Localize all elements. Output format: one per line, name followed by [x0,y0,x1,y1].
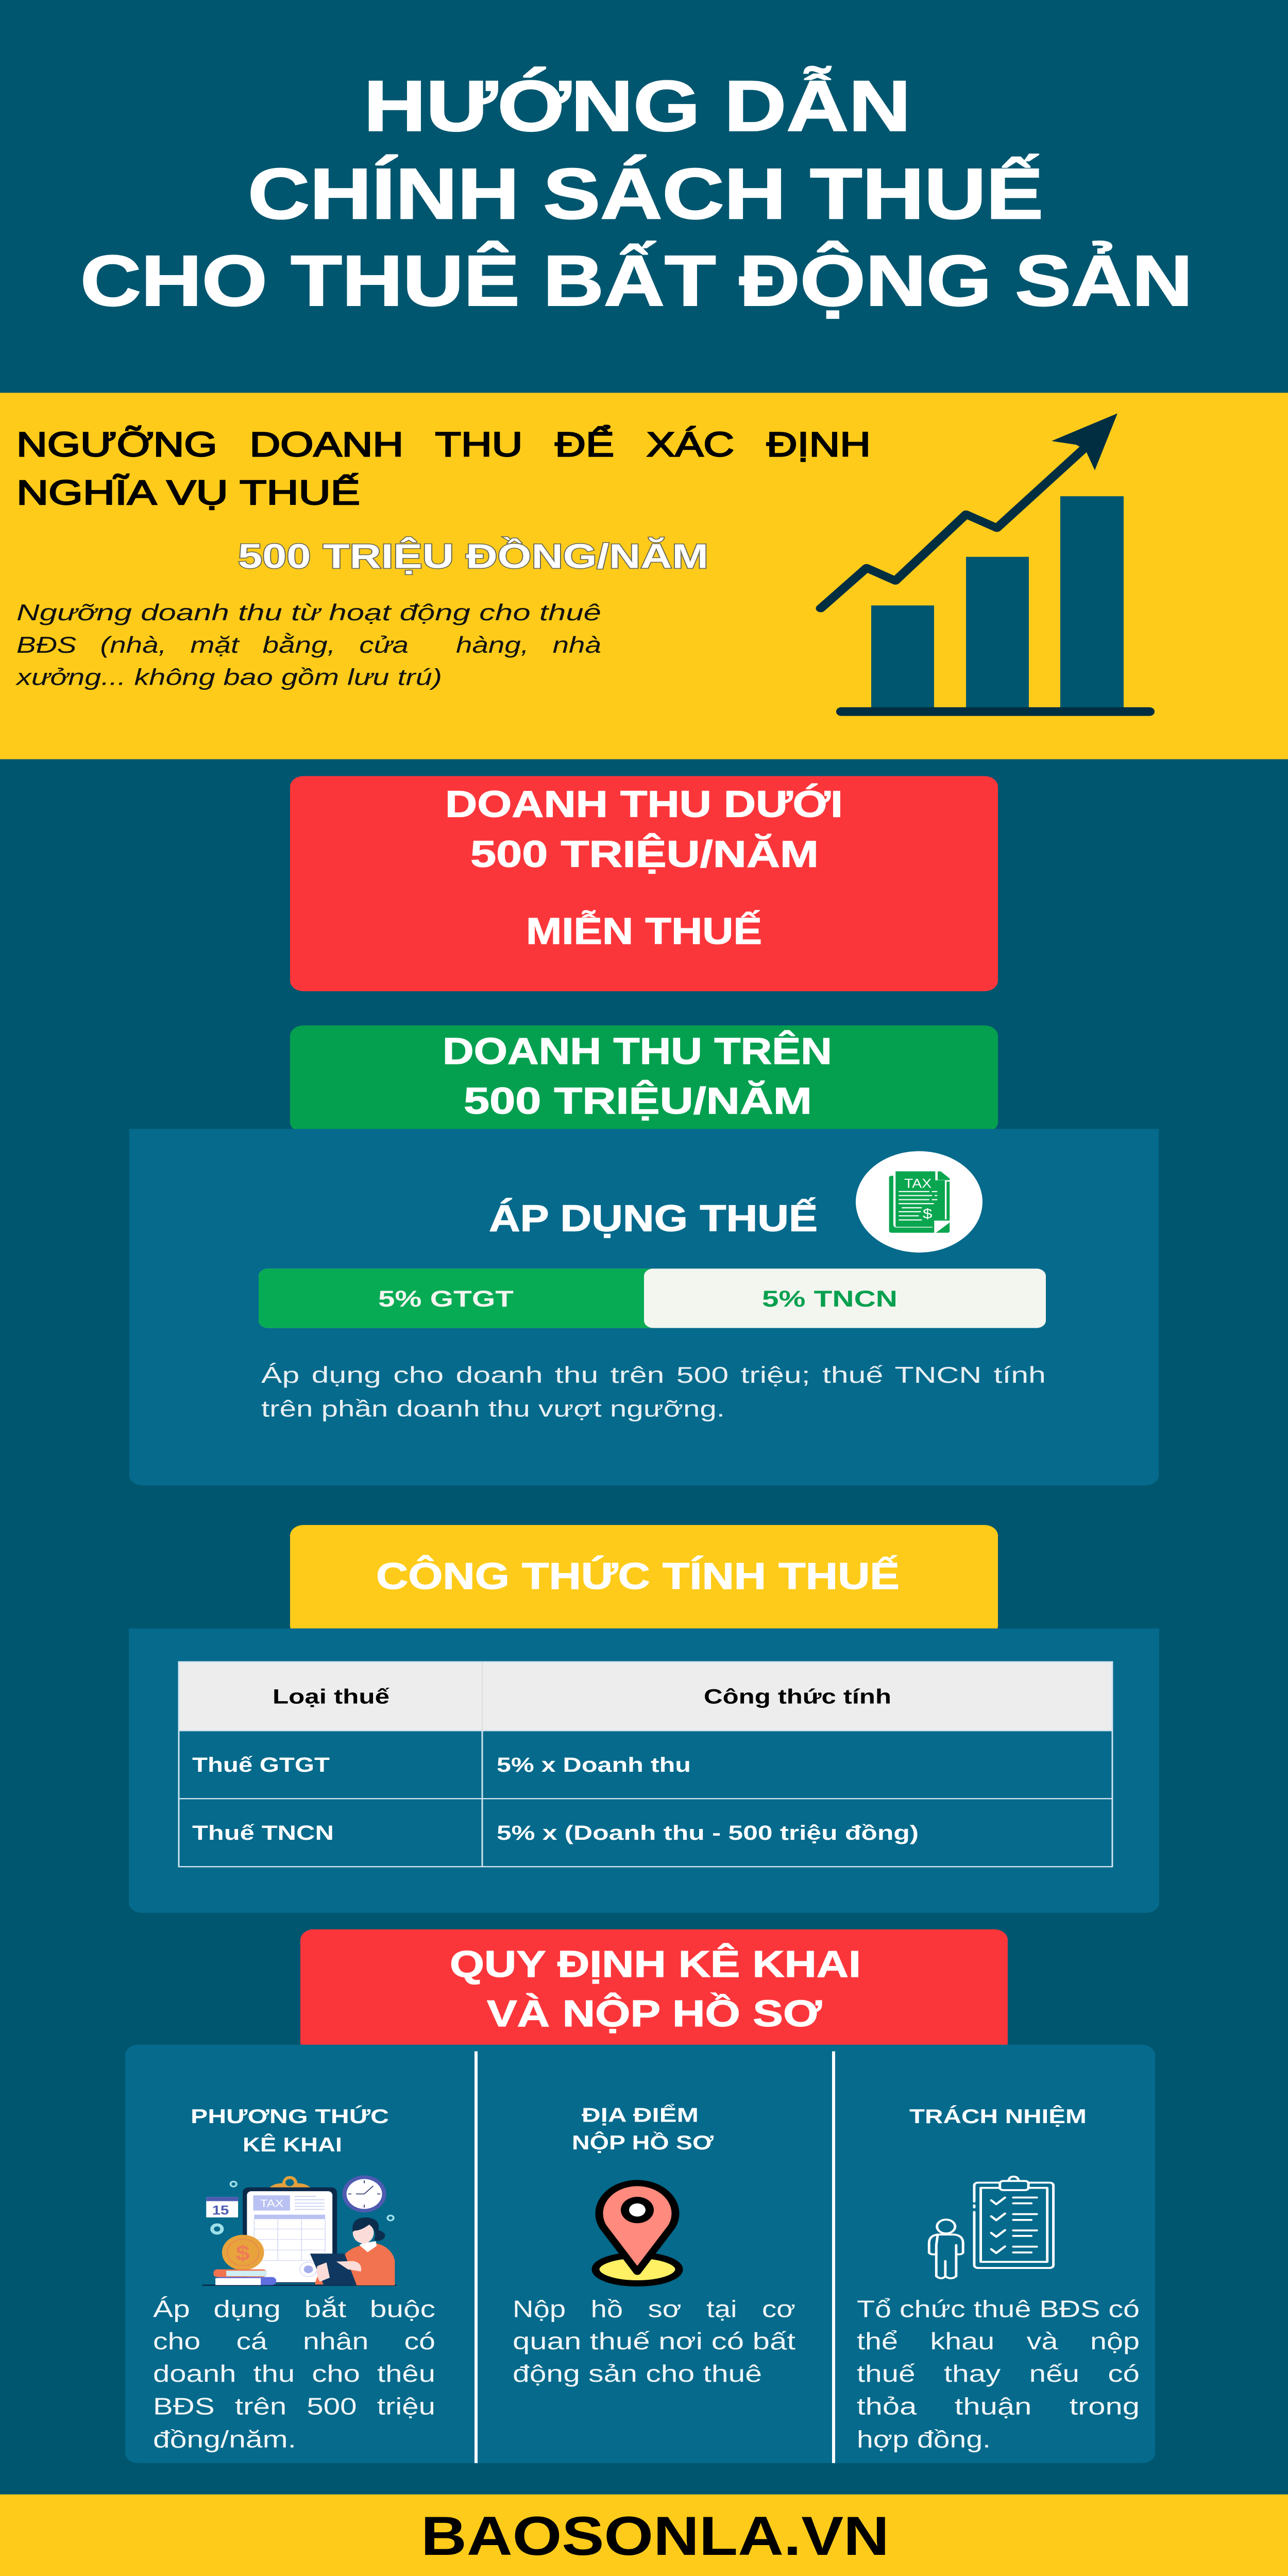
threshold heading: NGHĨA VỤ THUẾ [16,473,360,512]
icon: person with checklist [929,2177,1054,2278]
card: revenue under threshold: DOANH THU DƯỚI [445,784,843,825]
column text: đồng/năm. [153,2426,296,2453]
column heading: TRÁCH NHIỆM [909,2105,1087,2128]
table header: Công thức tính [704,1685,891,1708]
icon: tax document [856,1151,982,1252]
card: revenue under threshold [290,776,998,991]
column: responsibility [857,2105,1140,2453]
card: revenue over threshold: DOANH THU TRÊN [443,1030,832,1072]
row: PIT: Thuế TNCN [192,1821,334,1844]
threshold description [15,599,601,690]
illustration: woman with tax form [202,2176,397,2286]
tax split bar [259,1268,1046,1328]
applied taxes heading: ÁP DỤNG THUẾ [489,1198,818,1240]
card: revenue over threshold [290,1025,998,1132]
panel: applied taxes [129,1129,1159,1485]
icon: tax document: TAX [904,1176,931,1191]
footer [0,2495,1288,2576]
column text [513,2296,795,2387]
icon: rising bar chart [821,413,1155,716]
applied taxes description: trên phần doanh thu vượt ngưỡng. [261,1396,725,1421]
column heading: NỘP HỒ SƠ [572,2131,714,2154]
title [80,66,1193,321]
column text: Áp dụng bắt buộc [153,2296,435,2323]
column text: thể khau và nộp [857,2328,1140,2355]
threshold description: xưởng... không bao gồm lưu trú) [15,664,442,690]
column text: cho cá nhân có [153,2328,435,2355]
heading: tax formula: CÔNG THỨC TÍNH THUẾ [376,1556,900,1597]
row: PIT: 5% x (Doanh thu - 500 triệu đồng) [497,1821,919,1844]
threshold description: BĐS (nhà, mặt bằng, cửa hàng, nhà [16,632,601,658]
heading: declaration rules [300,1929,1008,2053]
icon: tax document: $ [923,1207,933,1222]
column text: Tổ chức thuê BĐS có [857,2296,1140,2323]
row: VAT: 5% x Doanh thu [497,1753,691,1776]
column: filing location [513,2103,795,2387]
column heading: PHƯƠNG THỨC [191,2105,389,2128]
table header: Loại thuế [273,1685,390,1708]
threshold heading: NGƯỠNG DOANH THU ĐỂ XÁC ĐỊNH [16,426,871,464]
VAT segment label: 5% GTGT [378,1285,514,1312]
title: CHÍNH SÁCH THUẾ [248,154,1043,234]
icon: location pin [596,2183,679,2283]
column text [153,2296,435,2453]
threshold description: Ngưỡng doanh thu từ hoạt động cho thuê [16,599,601,625]
panel: declaration details [125,2045,1155,2463]
applied taxes description [261,1362,1046,1421]
illustration: woman with tax form: 15 [212,2203,229,2217]
title: CHO THUÊ BẤT ĐỘNG SẢN [80,241,1193,321]
threshold heading [16,426,871,512]
heading: declaration rules: QUY ĐỊNH KÊ KHAI [450,1943,861,1985]
column text: doanh thu cho thêu [153,2361,435,2387]
panel: revenue threshold [0,393,1288,759]
column heading: KÊ KHAI [243,2133,342,2156]
applied taxes description: Áp dụng cho doanh thu trên 500 triệu; thuế TNCN tính [261,1362,1046,1388]
illustration: woman with tax form: TAX [260,2197,283,2209]
row: VAT: Thuế GTGT [192,1753,330,1776]
row: VAT [192,1753,691,1776]
column text: thuế thay nếu có [857,2361,1140,2387]
threshold value: 500 TRIỆU ĐỒNG/NĂM [238,536,708,575]
heading: tax formula [290,1525,998,1636]
card: revenue under threshold: MIỄN THUẾ [526,911,762,952]
card: revenue over threshold: 500 TRIỆU/NĂM [464,1080,812,1122]
table [178,1662,1113,1867]
heading: declaration rules: VÀ NỘP HỒ SƠ [487,1993,822,2035]
column text: thỏa thuận trong [857,2393,1140,2420]
table header [273,1685,891,1708]
column heading [572,2103,714,2154]
column heading: ĐỊA ĐIỂM [582,2103,699,2126]
row: PIT [192,1821,919,1844]
PIT segment label: 5% TNCN [762,1285,897,1312]
column text: quan thuế nơi có bất [513,2328,795,2355]
footer: BAOSONLA.VN [421,2505,889,2567]
column text [857,2296,1140,2453]
card: revenue under threshold: 500 TRIỆU/NĂM [470,834,819,875]
column text: động sản cho thuê [513,2361,762,2387]
title: HƯỚNG DẪN [364,66,911,146]
column heading [191,2105,389,2156]
column: declaration method [153,2105,435,2453]
illustration: woman with tax form: $ [236,2242,250,2265]
column text: Nộp hồ sơ tại cơ [513,2296,795,2323]
panel: formula table [129,1629,1159,1913]
column text: BĐS trên 500 triệu [153,2393,435,2420]
column text: hợp đồng. [857,2426,991,2453]
